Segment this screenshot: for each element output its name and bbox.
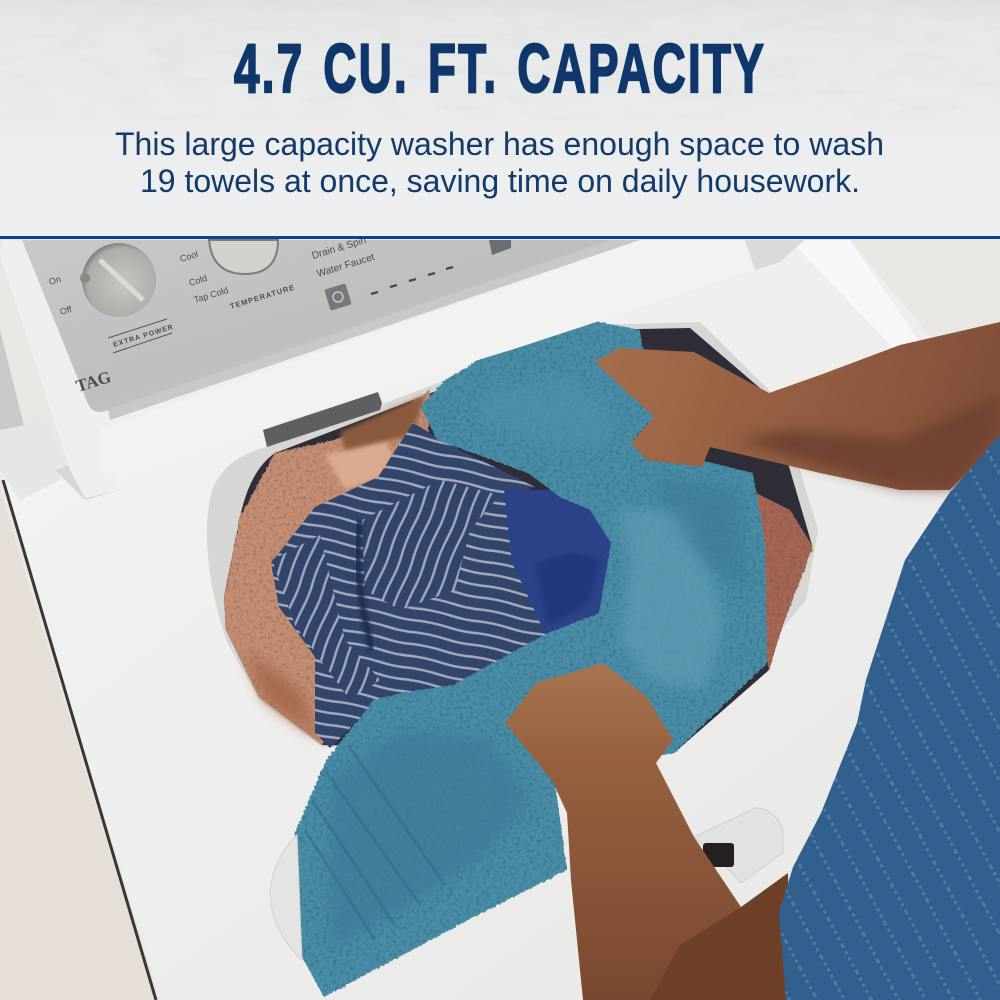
clothes: peach towel <box>224 390 813 745</box>
knob: temperature <box>209 240 278 274</box>
panel printed labels: Cold <box>188 273 208 288</box>
power button <box>324 283 352 311</box>
cycle indicators <box>371 267 453 294</box>
photo: wall and floor background <box>0 236 1000 1000</box>
panel printed labels: Cool <box>179 249 199 264</box>
panel printed labels: Drain & Spin <box>311 235 368 262</box>
panel printed labels: On <box>48 274 62 287</box>
panel printed labels: Off <box>59 304 73 317</box>
person: right upper arm and hand <box>595 322 1000 490</box>
clothes: teal towel <box>295 320 767 997</box>
description: 19 towels at once, saving time on daily housework. <box>140 163 860 199</box>
person: left arm and hand <box>505 663 790 1000</box>
description: This large capacity washer has enough space to wash <box>115 126 884 162</box>
header panel <box>0 0 1000 239</box>
photo: washer control lid <box>0 235 805 498</box>
start button <box>489 240 511 255</box>
description <box>115 126 884 199</box>
panel printed labels: TEMPERATURE <box>229 283 296 311</box>
person: blue shirt <box>779 435 1000 1000</box>
panel printed labels: Tap Cold <box>193 285 230 305</box>
lid latch <box>263 392 382 447</box>
panel printed labels: Water Faucet <box>316 252 376 280</box>
clothes: navy striped towel <box>271 423 565 748</box>
panel printed labels: TAG <box>74 367 113 396</box>
panel printed labels: EXTRA POWER <box>113 324 175 349</box>
photo: washer detergent slot <box>270 808 783 960</box>
photo: drum opening <box>207 322 818 753</box>
panel printed labels <box>48 235 376 396</box>
photo: washer body <box>0 240 1000 1000</box>
clothes: dark blue garment <box>504 490 615 640</box>
control panel <box>22 235 640 420</box>
knob: extra power <box>80 243 156 317</box>
